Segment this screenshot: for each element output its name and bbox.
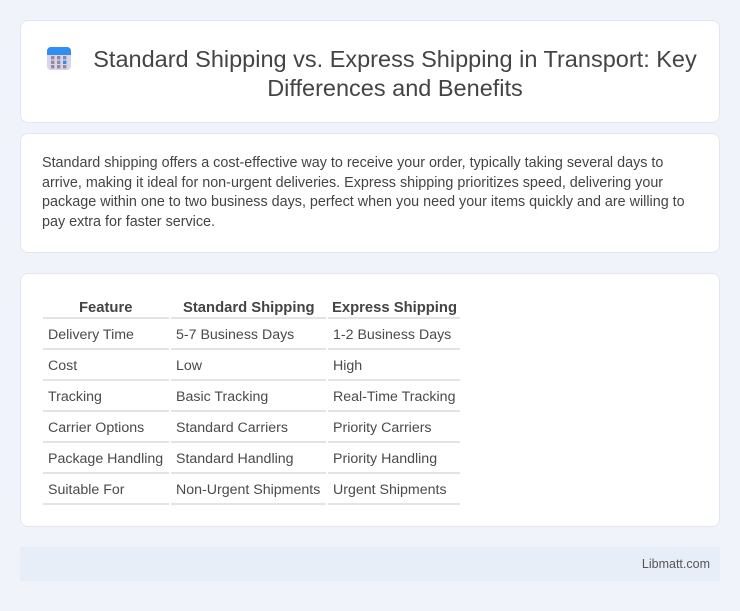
table header row: Standard Shipping (183, 300, 315, 316)
intro card (20, 133, 720, 253)
intro text: package within one to two business days, perfect when you need your items quickly and are willing to (42, 194, 685, 210)
row: suitable for (43, 482, 460, 505)
row: tracking: Tracking (48, 389, 102, 405)
intro text: pay extra for faster service. (42, 214, 215, 230)
header card (20, 20, 720, 123)
title: Standard Shipping vs. Express Shipping in Transport: Key (93, 46, 697, 72)
table header row (43, 300, 460, 319)
row: package handling: Priority Handling (333, 451, 437, 467)
row: cost: Low (176, 358, 202, 374)
title (93, 46, 697, 101)
row: cost: Cost (48, 358, 77, 374)
row: carrier options: Priority Carriers (333, 420, 432, 436)
row: delivery time (43, 327, 460, 350)
title: Differences and Benefits (267, 75, 523, 101)
row: package handling: Standard Handling (176, 451, 294, 467)
table header row: Feature (79, 300, 132, 316)
row: package handling: Package Handling (48, 451, 163, 467)
icon: calendar (47, 47, 71, 70)
row: suitable for: Non-Urgent Shipments (176, 482, 320, 498)
row: delivery time: 1-2 Business Days (333, 327, 451, 343)
row: tracking: Basic Tracking (176, 389, 268, 405)
row: carrier options: Carrier Options (48, 420, 144, 436)
row: tracking: Real-Time Tracking (333, 389, 455, 405)
intro text (42, 155, 685, 230)
intro text: arrive, making it ideal for non-urgent deliveries. Express shipping prioritizes speed, delivering your (42, 174, 663, 190)
table card (20, 273, 720, 527)
intro text: Standard shipping offers a cost-effective way to receive your order, typically taking several days to (42, 155, 663, 171)
row: cost (43, 358, 460, 381)
row: carrier options (43, 420, 460, 443)
row: carrier options: Standard Carriers (176, 420, 288, 436)
comparison table (43, 300, 460, 505)
table header row: Express Shipping (332, 300, 457, 316)
row: suitable for: Suitable For (48, 482, 124, 498)
row: suitable for: Urgent Shipments (333, 482, 447, 498)
row: package handling (43, 451, 460, 474)
footer credit: Libmatt.com (642, 557, 710, 571)
row: cost: High (333, 358, 362, 374)
row: tracking (43, 389, 460, 412)
footer bar (20, 547, 720, 581)
row: delivery time: Delivery Time (48, 327, 134, 343)
row: delivery time: 5-7 Business Days (176, 327, 294, 343)
